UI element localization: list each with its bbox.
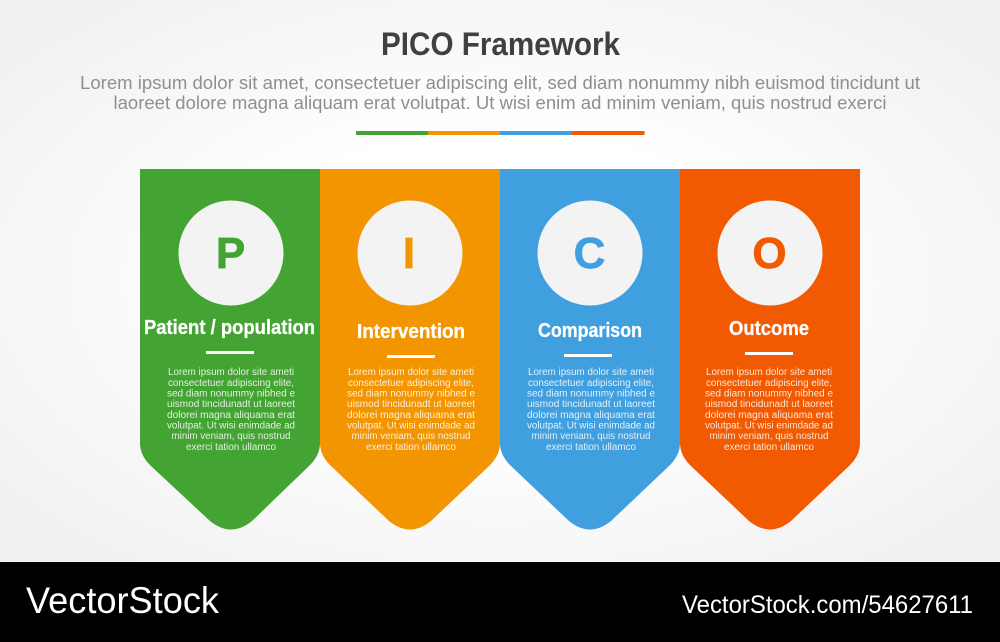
body text: green panel: consectetuer adipiscing elite, bbox=[168, 378, 294, 389]
colour rule under the header bbox=[356, 131, 644, 135]
heading: Outcome: Outcome bbox=[729, 318, 809, 340]
body text: orange panel bbox=[347, 367, 475, 453]
arrow banner: green bbox=[140, 169, 320, 530]
body text: red-orange panel bbox=[705, 367, 833, 453]
divider: blue panel bbox=[564, 354, 612, 357]
body text: orange panel: Lorem ipsum dolor site ameti bbox=[348, 367, 474, 378]
body text: blue panel: volutpat. Ut wisi enimdade ad bbox=[527, 420, 655, 432]
body text: blue panel: exerci tation ullamco bbox=[546, 442, 636, 453]
panel: Outcome bbox=[680, 169, 860, 530]
body text: orange panel: sed diam nonummy nibhed e bbox=[347, 388, 475, 400]
body text: blue panel: dolorei magna aliquama erat bbox=[527, 410, 655, 421]
body text: red-orange panel: Lorem ipsum dolor site ameti bbox=[706, 367, 832, 378]
footer brand: VectorStock bbox=[26, 580, 219, 621]
icon: circle I: I bbox=[403, 229, 415, 278]
panel: Intervention bbox=[320, 169, 500, 530]
body text: red-orange panel: volutpat. Ut wisi enimdade ad bbox=[705, 420, 833, 432]
body text: blue panel: Lorem ipsum dolor site ameti bbox=[528, 367, 654, 378]
body text: orange panel: uismod tincidunadt ut laoreet bbox=[347, 399, 475, 410]
icon: circle P bbox=[178, 200, 284, 306]
body text: blue panel: sed diam nonummy nibhed e bbox=[527, 388, 655, 400]
body text: orange panel: exerci tation ullamco bbox=[366, 442, 456, 453]
body text: green panel: Lorem ipsum dolor site ameti bbox=[168, 367, 294, 378]
icon: circle I bbox=[358, 200, 462, 306]
body text: red-orange panel: sed diam nonummy nibhed e bbox=[705, 388, 833, 400]
body text: blue panel: uismod tincidunadt ut laoreet bbox=[527, 399, 655, 410]
subtitle text: Lorem ipsum dolor sit amet, consectetuer adipiscing elit, sed diam nonummy nibh euismod tincidunt ut bbox=[80, 72, 920, 93]
subtitle text bbox=[80, 72, 920, 113]
body text: red-orange panel: exerci tation ullamco bbox=[724, 442, 814, 453]
body text: orange panel: consectetuer adipiscing elite, bbox=[348, 378, 474, 389]
arrow banner: orange bbox=[320, 169, 500, 530]
body text: green panel: minim veniam, quis nostrud bbox=[172, 431, 290, 442]
footer band bbox=[0, 562, 1000, 642]
divider: red-orange panel bbox=[745, 352, 793, 355]
icon: circle P: P bbox=[216, 229, 245, 278]
icon: circle O: O bbox=[752, 229, 787, 278]
arrow banner: blue bbox=[500, 169, 680, 530]
title: PICO Framework bbox=[381, 26, 620, 62]
arrow banner: red-orange bbox=[680, 169, 860, 530]
panel: Patient / population bbox=[140, 169, 320, 530]
heading: Intervention: Intervention bbox=[357, 321, 465, 343]
body text: orange panel: dolorei magna aliquama erat bbox=[347, 410, 475, 421]
body text: blue panel bbox=[527, 367, 655, 453]
body text: green panel: dolorei magna aliquama erat bbox=[167, 410, 295, 421]
heading: Comparison: Comparison bbox=[538, 320, 642, 342]
body text: orange panel: minim veniam, quis nostrud bbox=[352, 431, 470, 442]
body text: red-orange panel: uismod tincidunadt ut laoreet bbox=[705, 399, 833, 410]
divider: orange panel bbox=[387, 355, 435, 358]
body text: red-orange panel: minim veniam, quis nostrud bbox=[710, 431, 828, 442]
icon: circle O bbox=[718, 200, 822, 306]
body text: green panel bbox=[167, 367, 295, 453]
icon: circle C: C bbox=[574, 229, 605, 278]
body text: green panel: uismod tincidunadt ut laoreet bbox=[167, 399, 295, 410]
body text: blue panel: minim veniam, quis nostrud bbox=[532, 431, 650, 442]
body text: green panel: exerci tation ullamco bbox=[186, 442, 276, 453]
body text: blue panel: consectetuer adipiscing elite, bbox=[528, 378, 654, 389]
divider: green panel bbox=[206, 351, 254, 354]
heading: Patient / population: Patient / population bbox=[144, 317, 315, 339]
body text: red-orange panel: consectetuer adipiscing elite, bbox=[706, 378, 832, 389]
body text: orange panel: volutpat. Ut wisi enimdade ad bbox=[347, 420, 475, 432]
body text: green panel: volutpat. Ut wisi enimdade ad bbox=[167, 420, 295, 432]
panel: Comparison bbox=[500, 169, 680, 530]
icon: circle C bbox=[538, 200, 642, 306]
subtitle text: laoreet dolore magna aliquam erat volutpat. Ut wisi enim ad minim veniam, quis nostrud exerci bbox=[114, 92, 886, 113]
body text: green panel: sed diam nonummy nibhed e bbox=[167, 388, 295, 400]
body text: red-orange panel: dolorei magna aliquama erat bbox=[705, 410, 833, 421]
footer url: VectorStock.com/54627611 bbox=[682, 591, 973, 619]
